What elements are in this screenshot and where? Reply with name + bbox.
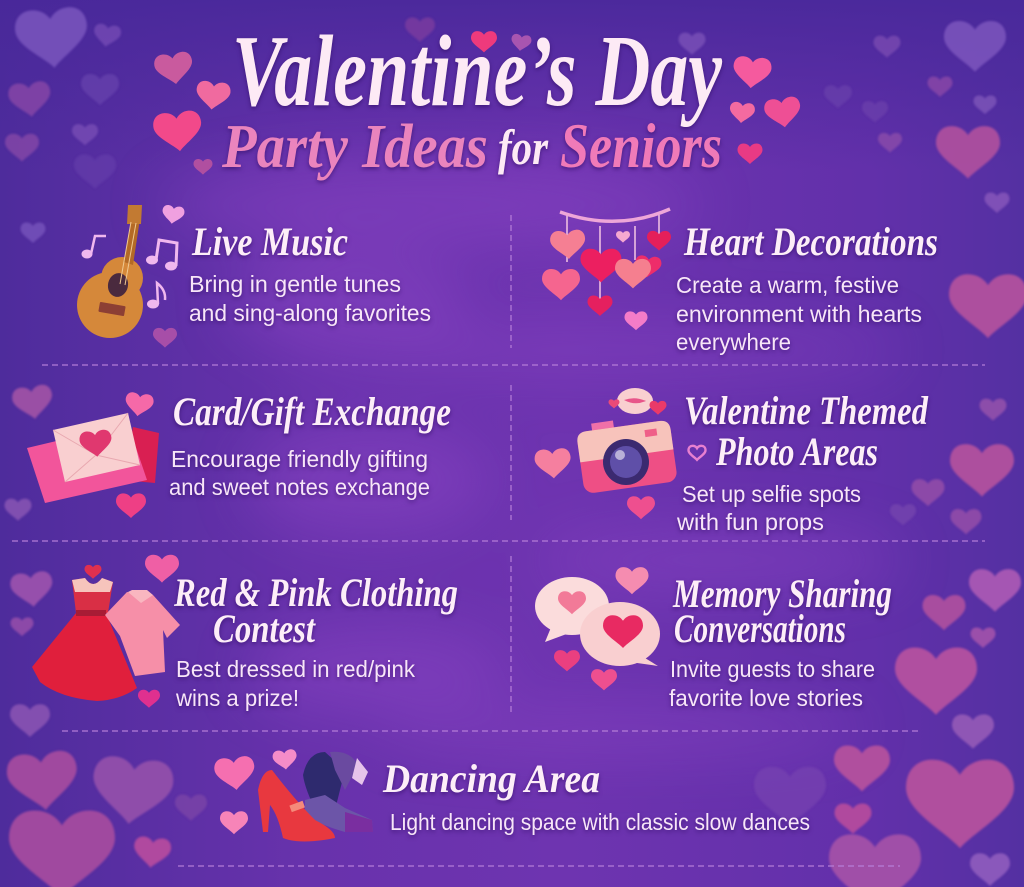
- panel: photo areas: [534, 388, 929, 535]
- panel: clothing contest: [32, 555, 458, 711]
- icon: envelopes: [27, 391, 159, 518]
- heading: clothing contest: [173, 570, 458, 651]
- text: heart decorations: everywhere: [676, 329, 791, 355]
- heading: live music: Live Music: [191, 219, 348, 264]
- text: photo areas: [676, 481, 861, 535]
- text: heart decorations: environment with hearts: [676, 301, 922, 327]
- title: Valentine’s Day: [232, 15, 723, 128]
- icon: dress and shirt: [32, 555, 180, 708]
- dividers: [12, 215, 985, 866]
- text: card gift exchange: Encourage friendly gifting: [171, 446, 428, 472]
- icon: speech bubbles: [535, 567, 660, 690]
- heading: clothing contest: Contest: [213, 606, 317, 651]
- text: heart decorations: Create a warm, festive: [676, 272, 899, 298]
- heading: clothing contest: Red & Pink Clothing: [173, 570, 458, 615]
- text: card gift exchange: [169, 446, 430, 500]
- text: photo areas: with fun props: [676, 509, 824, 535]
- text: card gift exchange: and sweet notes exchange: [169, 474, 430, 500]
- heading: photo areas: [684, 388, 929, 474]
- heading: memory sharing: Conversations: [674, 606, 846, 651]
- heading: memory sharing: [672, 571, 892, 651]
- text: live music: Bring in gentle tunes: [189, 271, 401, 297]
- panel: heart decorations: [542, 209, 938, 355]
- panel: dancing area: [213, 749, 810, 842]
- icon: small outlined heart: [688, 446, 706, 460]
- heading: heart decorations: Heart Decorations: [683, 219, 938, 264]
- title: Party Ideas: [221, 113, 488, 181]
- icon: camera: [534, 388, 678, 519]
- text: live music: and sing-along favorites: [189, 300, 431, 326]
- text: clothing contest: wins a prize!: [175, 685, 299, 711]
- text: photo areas: Set up selfie spots: [682, 481, 861, 507]
- icon: guitar and notes: [77, 204, 185, 348]
- heading: dancing area: Dancing Area: [382, 756, 600, 801]
- heading: photo areas: Photo Areas: [715, 429, 878, 474]
- title: [221, 15, 723, 181]
- title: Seniors: [560, 110, 722, 181]
- title hearts: [152, 31, 803, 175]
- text: clothing contest: [175, 656, 415, 711]
- text: dancing area: Light dancing space with classic slow dances: [390, 809, 810, 835]
- heading: memory sharing: Memory Sharing: [672, 571, 892, 616]
- text: memory sharing: [669, 656, 875, 711]
- text: live music: [189, 271, 431, 326]
- icon: dancing shoes: [213, 749, 373, 842]
- text: heart decorations: [676, 272, 922, 355]
- panel: live music: [77, 204, 431, 348]
- icon: hanging hearts: [542, 209, 671, 330]
- heading: card gift exchange: Card/Gift Exchange: [173, 389, 451, 434]
- panel: memory sharing: [535, 567, 892, 711]
- panel: card gift exchange: [27, 389, 451, 518]
- heading: photo areas: Valentine Themed: [684, 388, 929, 433]
- title: for: [498, 119, 548, 175]
- text: clothing contest: Best dressed in red/pink: [176, 656, 415, 682]
- text: memory sharing: favorite love stories: [669, 685, 863, 711]
- text: memory sharing: Invite guests to share: [670, 656, 875, 682]
